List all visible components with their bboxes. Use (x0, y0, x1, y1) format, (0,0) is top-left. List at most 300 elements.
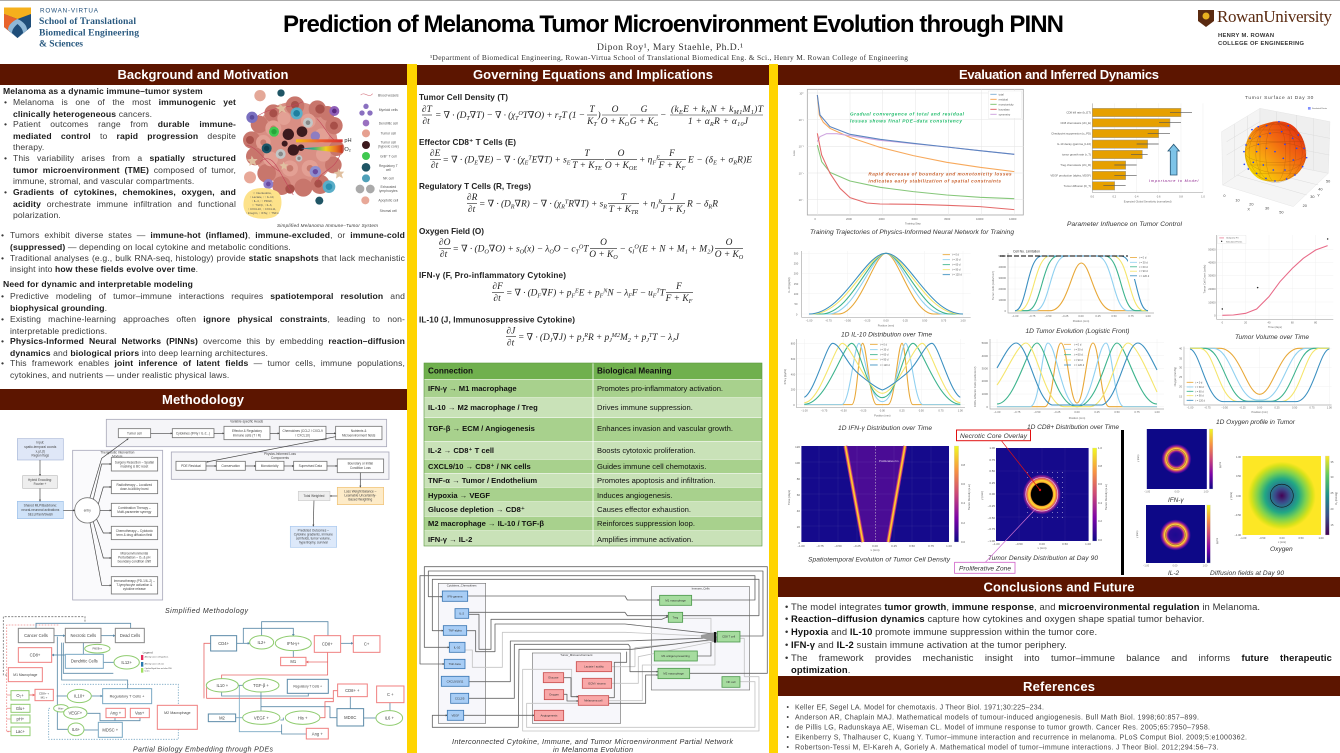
heatmap: tumor density at day 90: −0.25 (988, 504, 995, 508)
network diagram: cytokine, immune and tumor microenvironment: Tumor_Microenvironment (560, 653, 593, 657)
cell type legend: Blood vessels (378, 93, 399, 97)
legend (1187, 381, 1206, 402)
equation: IL-10: ∂t (507, 338, 515, 348)
chart: training loss trajectories: 10⁰ (799, 91, 803, 95)
chart: parameter sensitivity bars: Treg chemotaxis (chi_R) (1060, 163, 1091, 167)
left network: Dendritic Cells (71, 659, 98, 664)
heatmap: spatiotemporal tumor density: x (mm) (870, 548, 880, 552)
label: IL-2: IL-2 (1168, 570, 1179, 577)
chart: parameter sensitivity bars: 0.6 (1157, 194, 1161, 198)
equation: effector CD8 T cells: F + KF (658, 161, 686, 172)
chart: training loss trajectories: 8000 (944, 217, 951, 221)
blood vessels (247, 102, 340, 195)
cell type legend: Tumor cell (381, 132, 396, 136)
chart: 3D tumor surface: Y (1317, 193, 1320, 197)
tumor microenvironment nodes: Angiogenesis (540, 713, 558, 717)
logo: Rowan University: RowanUniversity (1217, 7, 1332, 26)
chart: 1D tumor evolution logistic front: t = 90 d (1139, 269, 1148, 273)
input nodes (17, 439, 63, 519)
references list: Robertson-Tessi M, El-Kareh A, Goriely A. Mathematical model of tumor–immune interactions. J Theor Biol. 2012;294:56–73. (795, 744, 1219, 752)
table: connections and biological meaning: Connection (428, 366, 473, 376)
tumor microenvironment nodes: Glucose (548, 676, 559, 680)
cytokine nodes: IL-2 (459, 612, 465, 616)
heatmap: tumor density at day 90: 0.00 (989, 492, 995, 496)
text block: melanoma bullet 4: acidity orchestrate immune infiltration and functional (13, 199, 236, 209)
left network: Lac+ (16, 729, 25, 734)
equation: oxygen field: ∂O (439, 238, 451, 248)
orange annotation (868, 172, 1012, 184)
heatmap: oxygen field: −0.50 (1259, 536, 1266, 540)
therapeutic intervention group: cytokine release (123, 587, 146, 591)
chart: 1D IFN-gamma distribution: −0.25 (860, 409, 867, 413)
input nodes: Hybrid Encoding: (28, 478, 52, 482)
chart: tumor volume over time: 40 (1267, 320, 1271, 324)
legend: factors (145, 669, 150, 672)
heatmap: spatiotemporal tumor density: Proliferative rim (879, 459, 899, 463)
caption: spatiotemporal evolution: Spatiotemporal Evolution of Tumor Cell Density (808, 556, 951, 564)
heatmap: spatiotemporal tumor density: 0.4 (961, 501, 965, 505)
text: • (1, 291, 4, 301)
chart: tumor volume over time: 0 (1222, 320, 1224, 324)
entry node (75, 498, 100, 523)
chart: 1D IL-10 distribution: 0 (796, 312, 798, 316)
chart: 1D CD8+ distribution: 4000 (982, 354, 988, 358)
legend: Affecting Cancer cells rate (145, 662, 164, 665)
heatmap: spatiotemporal tumor density: −1.00 (797, 544, 805, 548)
yellow column divider right (769, 64, 778, 753)
chart: 3D tumor surface: Tumor Surface at Day 30 (1245, 95, 1314, 101)
chart: 1D CD8+ distribution: Position (mm) (1069, 416, 1085, 420)
equation: IFN-gamma: = ∇ · (DF∇F) + pFEE + pFNN − λFF − uFTT (506, 287, 666, 300)
equation: regulatory T cells: + ηJR (642, 198, 662, 210)
legend: t = 90 d (952, 269, 961, 272)
therapeutic intervention group: term & drug diffusion field (116, 533, 152, 537)
text block: melanoma bullet 2: mediated control to rapid progression despite (13, 131, 236, 141)
therapeutic intervention group: Combination Therapy – (118, 506, 151, 510)
caption: CD8+ distribution: 1D CD8+ Distribution over Time (1027, 424, 1119, 431)
legend: Simulated Points (1226, 240, 1242, 243)
chart: 1D CD8+ distribution: 1.00 (1154, 410, 1160, 414)
chart: 1D oxygen profile: Oxygen (mmHg) (1173, 367, 1177, 386)
chart: parameter sensitivity bars: VEGF production (alpha_VEGF) (1050, 174, 1091, 178)
text block: melanoma bullet 1 (4, 97, 236, 119)
text block: traditional analyses bullet: Traditional analyses (e.g., bulk RNA-seq, histology) provide static snapshots that lack mechanistic (10, 253, 405, 263)
table: connections and biological meaning: Boosts cytotoxic proliferation. (597, 446, 696, 455)
chart: tumor volume over time: 50000 (1208, 248, 1216, 252)
chart: 1D IL-10 distribution: Position (mm) (878, 324, 894, 328)
left network: Necrotic Cells (71, 633, 96, 638)
chart: 3D tumor surface: 0 (1223, 194, 1225, 198)
heatmap: tumor density at day 90: 0.4 (1098, 501, 1102, 505)
heatmap: IL-2 field: −1.00 (1143, 564, 1150, 568)
chart: 1D oxygen profile: 40 (1179, 347, 1183, 351)
chart: parameter sensitivity bars: 0.8 (1179, 194, 1183, 198)
cytokine nodes: IFN-gamma (448, 594, 463, 598)
chart: 3D tumor surface: 30 (1265, 207, 1269, 211)
caption: tumor density day 90: Tumor Density Distribution at Day 90 (988, 555, 1098, 562)
left network: CD8+ + (39, 691, 49, 695)
left network: Regulatory T Cells + (110, 695, 145, 699)
heading: Conclusions and Future (778, 577, 1340, 597)
logo: Rowan-Virtua School: & Sciences (39, 38, 83, 50)
table: connections and biological meaning: Promotes apoptosis and infiltration. (597, 476, 716, 485)
right network: IL10 + (216, 683, 229, 688)
chart: tumor volume over time: 60 (1291, 320, 1294, 324)
text block: melanoma heading: Melanoma as a dynamic immune–tumor system (3, 86, 203, 96)
equation: IL-10: IL-10 (J, Immunosuppressive Cytokine) (419, 316, 575, 324)
heatmap: tumor density at day 90: 0.25 (989, 481, 995, 485)
table: connections and biological meaning: IL-10 → M2 macrophage / Treg (428, 403, 538, 412)
right network: MDSC (344, 715, 356, 720)
chart: 1D CD8+ distribution: 0.75 (1134, 410, 1140, 414)
equation: effector CD8 T cells: ∂t (431, 161, 439, 171)
equation: IL-10: = ∇ · (DJ∇J) + pJRR + pJM2M2 + pJTT − λJJ (518, 332, 680, 344)
text: • (785, 652, 788, 662)
therapeutic intervention group: Multi-parameter synergy (117, 510, 152, 514)
heading: Governing Equations and Implications (417, 65, 769, 85)
chart: 1D tumor evolution logistic front: t = 30 d (1139, 260, 1148, 264)
right network: M2 (219, 715, 226, 720)
chart: parameter sensitivity bars: CD8 chemotaxis (chi_E) (1060, 121, 1091, 125)
chart: 1D tumor evolution logistic front: t = 0 d (1139, 256, 1147, 260)
input nodes: x,y,t,(t) (36, 449, 45, 453)
equation: effector CD8 T cells: T + KTE (572, 161, 602, 172)
left network: His+ (58, 707, 64, 711)
chart: 1D tumor evolution logistic front: t = 60 d (1139, 265, 1148, 269)
references list: de Pillis LG, Radunskaya AE, Wiseman CL. Model of immune response to tumor growth. Cancer Res. 2005;65:7950–7958. (795, 724, 1210, 732)
equation: effector CD8 T cells: F (668, 149, 675, 159)
text block: traditional analyses bullet (1, 253, 405, 274)
references list: Keller EF, Segel LA. Model for chemotaxis. J Theor Biol. 1971;30:225–234. (795, 704, 1044, 712)
heatmap: spatiotemporal tumor density: 100 (795, 461, 800, 465)
chart: 1D tumor evolution logistic front: 0.00 (1078, 314, 1084, 318)
chart: parameter sensitivity bars: CD8 kill rate (k_ET) (1066, 111, 1091, 115)
chart: 1D tumor evolution logistic front: −0.50 (1045, 314, 1052, 318)
convergence bar on CD8 node (701, 632, 716, 643)
physics-informed loss group: Components (271, 456, 289, 460)
equation: tumor cell density: ∂t (422, 117, 430, 127)
logo: Rowan-Virtua School (4, 8, 139, 50)
text block: traditional analyses bullet: insight into how these fields evolve over time. (10, 264, 198, 274)
variable-specific heads group: Nutrients & (351, 429, 367, 433)
chart: 1D tumor evolution logistic front: −0.75 (1029, 314, 1036, 318)
therapeutic intervention group: Perturbation – O₂ & pH (118, 556, 151, 560)
input nodes: Input: (36, 441, 44, 445)
heatmap: IFN-gamma field: 1.00 (1204, 490, 1209, 494)
chart: 1D oxygen profile: −0.75 (1204, 406, 1211, 410)
equation: effector CD8 T cells (419, 138, 752, 172)
equation: regulatory T cells: R − δRR (686, 200, 718, 210)
chart: 1D IL-10 distribution: 300 (794, 251, 799, 255)
loss weighting nodes: Learnable Uncertainty- (344, 494, 376, 498)
green annotation (850, 112, 965, 124)
right network: His + (298, 715, 308, 720)
text block: conclusion 5: optimization. (791, 664, 851, 675)
equation: regulatory T cells (419, 182, 718, 216)
table: connections and biological meaning: Amplifies immune activation. (597, 535, 693, 544)
immune cell nodes (654, 595, 740, 687)
legend: t = 0 d (952, 254, 960, 257)
therapeutic intervention group: Therapeutic Intervention (100, 450, 135, 454)
heatmap: tumor density at day 90: 1.00 (1085, 542, 1091, 546)
legend: Affecting Cancer cell hypothesis (145, 656, 168, 659)
chart: 1D IL-10 distribution: −0.25 (864, 318, 871, 322)
cytokine nodes: CXCL9/10/11 (447, 679, 464, 683)
equation: effector CD8 T cells: O (618, 149, 625, 159)
chart: 1D CD8+ distribution: 0.50 (1114, 410, 1120, 414)
left network: M1 Macrophage (13, 673, 37, 677)
chart: tumor volume over time (1202, 235, 1333, 329)
chart: 1D IL-10 distribution: −1.00 (806, 318, 813, 322)
therapeutic intervention group: boundary condition shift (118, 560, 151, 564)
heading: Evaluation and Inferred Dynamics (778, 65, 1340, 85)
chart: 1D CD8+ distribution: 3000 (982, 366, 988, 370)
table: connections and biological meaning: TNF-α → Tumor / Endothelium (428, 476, 537, 485)
cell type legend: cell (386, 168, 391, 172)
equation: tumor cell density: − (660, 111, 666, 121)
text block: melanoma bullet 3 (4, 153, 236, 186)
chart: 1D oxygen profile: 35 (1179, 356, 1183, 360)
chart: 1D IL-10 distribution: −0.75 (825, 318, 832, 322)
heatmap: tumor density at day 90: 0.50 (989, 469, 995, 473)
equation: tumor cell density: G + KG (630, 117, 659, 128)
cytokine nodes: TGF-beta (449, 662, 461, 666)
chart: 1D IL-10 distribution: IL-10 (pg/ml) (787, 277, 791, 293)
physics-informed loss group: Physics-Informed Loss (264, 452, 296, 456)
green annotation: losses shows final PDE–data consistency (850, 119, 962, 124)
tumor microenvironment nodes: Oxygen (549, 693, 559, 697)
equation: oxygen field (419, 227, 744, 261)
heatmap: spatiotemporal tumor density: 0.25 (891, 544, 897, 548)
right network: C+ (364, 642, 370, 647)
text block: melanoma bullet 1: clinically heterogeneous cancers. (13, 109, 152, 119)
chart: 1D tumor evolution logistic front: 0.50 (1111, 314, 1117, 318)
logo: Rowan-Virtua School: School of Translational (39, 16, 136, 27)
heatmap: oxygen field: −1.00 (1240, 536, 1247, 540)
caption: simplified melanoma system: Simplified Melanoma Immune–Tumor System (277, 223, 378, 228)
heatmap: oxygen field: O₂ (mmHg) (1334, 492, 1338, 505)
caption: interconnected network: Interconnected Cytokine, Immune, and Tumor Microenvironment Partial Network (452, 737, 733, 746)
right network: M1 (290, 659, 297, 664)
cell type legend: GrB⁺ T cell (380, 154, 397, 158)
variable-specific heads group: Chemokines (CCL2 / CXCL9 (282, 429, 323, 433)
heatmap: oxygen field: 25 (1330, 491, 1334, 495)
cell type legend: (hypoxic core) (378, 145, 399, 149)
chart: 1D CD8+ distribution: −0.25 (1054, 410, 1061, 414)
references list: • (786, 744, 790, 752)
chart: parameter sensitivity bars: 0.2 (1112, 194, 1117, 198)
text block: conclusion 2: Reaction–diffusion dynamics capture how cytokines and oxygen shape spatial tumor behavior. (791, 613, 1204, 624)
text block: predictive modeling bullet (1, 291, 405, 313)
references list: • (786, 734, 790, 742)
left network: M1 + (41, 696, 48, 700)
equation: oxygen field: = ∇ · (DO∇O) + sO(x) − λOO − cTOT (452, 243, 589, 256)
legend: t = 60 d (1195, 390, 1204, 393)
table: connections and biological meaning: Causes effector exhaustion. (597, 505, 691, 514)
right network: CD8+ + (345, 688, 360, 693)
references list: • (786, 714, 790, 722)
authors: Dipon Roy¹, Mary Staehle, Ph.D.¹ (597, 42, 743, 53)
text block: melanoma bullet 4: Gradients of cytokines, chemokines, oxygen, and (13, 187, 236, 197)
table: connections and biological meaning: CXCL9/10 → CD8⁺ / NK cells (428, 462, 531, 471)
equation: IL-10 (419, 316, 680, 348)
chart: tumor volume over time: 10000 (1208, 300, 1216, 304)
cytokine callout blob (243, 188, 281, 219)
text block: need for modeling heading: Need for dynamic and interpretable modeling (3, 279, 193, 289)
chart: 3D tumor surface: 50 (1279, 211, 1284, 215)
chart: tumor volume over time: 20 (1244, 320, 1248, 324)
text block: PINNs bullet: dynamics and biological priors into deep learning architectures. (10, 348, 268, 358)
references list: • (786, 724, 790, 732)
legend: t = 120 d (880, 364, 890, 367)
equation: IFN-gamma (419, 271, 693, 305)
equation: oxygen field: ∂t (440, 250, 448, 260)
heatmap: spatiotemporal tumor density: 0 (798, 541, 800, 545)
heatmap: oxygen field: 0.50 (1298, 536, 1304, 540)
physics-informed loss group: Boundary or Initial (348, 462, 373, 466)
heatmap: spatiotemporal tumor density (787, 445, 971, 552)
chart: 1D IL-10 distribution: 0.25 (903, 318, 908, 322)
heatmap: spatiotemporal tumor density: −0.50 (834, 544, 842, 548)
legend: t = 90 d (1195, 395, 1204, 398)
orange annotation: Rapid decrease of boundary and monotonicity losses (868, 172, 1012, 177)
text block: PINNs bullet (1, 336, 405, 358)
chart: 1D IFN-gamma distribution: 1.00 (958, 409, 963, 413)
text block: melanoma bullet 3: immune, stromal, and vascular compartments. (13, 176, 194, 186)
chart: 1D oxygen profile: −1.00 (1187, 406, 1194, 410)
variable-specific heads group: Immune cells (T / R) (233, 433, 261, 437)
heatmap: spatiotemporal tumor density: −0.75 (816, 544, 824, 548)
chart: tumor volume over time: 40000 (1208, 261, 1216, 265)
table: connections and biological meaning: Enhances invasion and vascular growth. (597, 424, 733, 433)
table: connections and biological meaning: IL-2 → CD8⁺ T cell (428, 446, 494, 455)
cell type legend (356, 93, 399, 213)
heatmap: oxygen field: 15 (1330, 523, 1334, 527)
heatmap: IFN-gamma field: y (mm) (1137, 454, 1140, 462)
text: • (785, 639, 788, 650)
left network: pH+ (16, 717, 25, 722)
legend (943, 254, 962, 277)
left network (3, 617, 197, 739)
heatmap: tumor density at day 90: −0.50 (988, 516, 995, 520)
physics-informed loss group: PDE Residual (181, 464, 201, 468)
equation: oxygen field: Oxygen Field (O) (419, 227, 484, 236)
therapeutic intervention group: T-lymphocyte activation & (116, 583, 153, 587)
left network: Vas+ (135, 710, 145, 715)
loss legend (988, 91, 1022, 118)
heatmap: spatiotemporal tumor density: 0.75 (928, 544, 934, 548)
legend: t = 60 d (880, 354, 889, 357)
references list: Anderson AR, Chaplain MAJ. Mathematical models of tumour-induced angiogenesis. Bull Math Biol. 1998;60:857–899. (795, 714, 1199, 722)
heatmap: tumor density at day 90 (980, 446, 1108, 550)
chart: 1D IFN-gamma distribution: 200 (791, 388, 796, 392)
left network: Dead Cells (120, 633, 140, 638)
chart: 1D IL-10 distribution: 0.50 (922, 318, 928, 322)
subgroup frames (438, 583, 750, 723)
chart: 3D tumor surface: 20 (1303, 204, 1307, 208)
right network: IL6 + (385, 716, 395, 721)
right network: C + (387, 692, 394, 697)
label: oxygen: Oxygen (1270, 546, 1293, 553)
text block: melanoma bullet 2: therapy. (13, 142, 44, 152)
equation: tumor cell density: ) (596, 110, 601, 121)
equation: tumor cell density: (kEE + kNN + kM1M1)T (671, 104, 764, 116)
chart: tumor volume over time: 80 (1314, 320, 1318, 324)
left network: PMGB++ (93, 649, 103, 651)
physics-informed loss group: Supervised Data (299, 464, 322, 468)
right network: CD8+ (322, 642, 333, 647)
chart: 3D tumor surface (1222, 95, 1330, 215)
variable-specific heads group: Effector & Regulatory (232, 429, 262, 433)
chart: 1D CD8+ distribution: −0.75 (1014, 410, 1021, 414)
chart: 1D IL-10 distribution: 150 (794, 282, 799, 286)
immune cell nodes: M1 macrophage (665, 598, 686, 602)
right network: TGF-β + (253, 683, 269, 688)
legend: t = 0 d (1195, 381, 1203, 384)
chart: training loss trajectories: 10000 (976, 217, 984, 221)
heatmap: tumor density at day 90: −1.00 (988, 539, 995, 543)
chart: training loss trajectories: 2000 (846, 217, 852, 221)
gradient bars pH and O2 (296, 138, 352, 153)
chart: training loss trajectories: 10⁻³ (799, 145, 804, 149)
equation: regulatory T cells: J + KJ (661, 205, 685, 216)
chart: 3D tumor surface: 30 (1310, 195, 1315, 199)
network diagram: cytokine, immune and tumor microenvironment: Immune_Cells (692, 587, 710, 591)
heatmap: spatiotemporal tumor density: 120 (795, 445, 800, 449)
loss weighting nodes: hypertrophy, survival (299, 541, 328, 545)
logo: Rowan University: COLLEGE OF ENGINEERING (1218, 41, 1304, 47)
text block: tumor states bullet (1, 230, 405, 252)
text block: conclusion 4: IFN-γ and IL-2 sustain immune activation at the tumor periphery. (791, 639, 1067, 650)
input nodes: Region flags (32, 454, 50, 458)
chart: training loss trajectories: Training Step (905, 222, 921, 226)
chart: training loss trajectories: 0 (814, 217, 816, 221)
logo: Rowan-Virtua School: Biomedical Engineering (39, 28, 139, 38)
heatmap: tumor density at day 90: 0.00 (1039, 542, 1045, 546)
cytokine callout blob: ↑ IL-4, ↑↑ PDGF, (251, 199, 273, 203)
heatmap: spatiotemporal tumor density: 80 (797, 477, 800, 481)
heatmap: IL-2 field: 1.00 (1203, 564, 1208, 568)
loss legend: symmetry (999, 112, 1011, 116)
table: connections and biological meaning: Promotes pro-inflammatory activation. (597, 384, 723, 393)
legend (141, 650, 173, 673)
heatmap: oxygen field: 0.00 (1279, 536, 1285, 540)
equation: tumor cell density: T (589, 105, 595, 115)
legend: t = 90 d (880, 359, 889, 362)
text block: melanoma bullet 3: tumor microenvironment (TME) composed of tumor, (13, 165, 236, 175)
chart: 1D tumor evolution logistic front: t = 120 d (1139, 274, 1150, 278)
references list: Eikenberry S, Thalhauser C, Kuang Y. Tumor–immune interaction and recurrence in melanoma. PLoS Comput Biol. 2009;5:e1000362. (795, 734, 1247, 742)
left network: CD8+ (30, 652, 41, 657)
text block: PINNs bullet: Physics-Informed Neural Networks (PINNs) overcome this by embedding reaction–diffusion (10, 336, 405, 346)
heatmap: oxygen field: 30 (1330, 475, 1334, 479)
chart: 1D IFN-gamma distribution: 800 (791, 342, 796, 346)
equation: oxygen field: O + KO (589, 250, 618, 261)
equation: effector CD8 T cells: ∂E (430, 149, 441, 159)
hypoxic core (282, 126, 307, 156)
chart: parameter sensitivity bars: Checkpoint suppression (c_PD) (1051, 132, 1091, 136)
chart: parameter sensitivity bars: 0.0 (1090, 194, 1095, 198)
text block: melanoma bullet 3: This variability arises from a spatially structured (13, 153, 236, 163)
network diagram: cytokine, immune and tumor microenvironment: Cytokines_Chemokines (447, 583, 477, 587)
caption: simplified methodology: Simplified Methodology (165, 608, 248, 615)
equation: IFN-gamma: F (675, 282, 682, 292)
text: • (1, 230, 4, 240)
equation: tumor cell density: KT (586, 117, 597, 128)
equation: tumor cell density: ∂T (422, 105, 433, 115)
affiliation: ¹Department of Biomedical Engineering, Rowan-Virtua School of Translational Biomedical Eng. & Sci., Henry M. Rowan College of Engineering (430, 53, 908, 62)
cytokine nodes: CCL2/5 (455, 696, 465, 700)
